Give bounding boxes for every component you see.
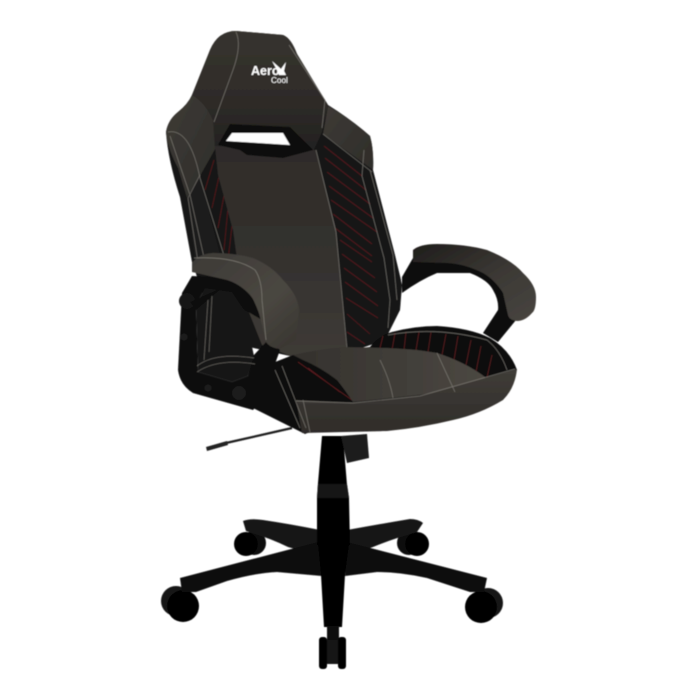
seat: [253, 326, 517, 434]
back right caster: [397, 531, 429, 556]
left armrest: [178, 253, 299, 410]
back left leg: [243, 519, 320, 556]
left wing: [166, 95, 218, 198]
arm adjuster: [179, 288, 246, 400]
left side panel with red stripes: [187, 148, 238, 262]
logo: Cool: [271, 76, 288, 85]
right wing: [323, 106, 373, 170]
left arm pad: [192, 253, 299, 349]
right side panel: [323, 135, 401, 347]
centre suede panel: [215, 146, 347, 358]
black side panels lower left: [187, 176, 222, 262]
front right leg: [345, 542, 487, 592]
base: star legs and casters: [161, 428, 503, 669]
seat suede cushion: [293, 347, 487, 402]
red stitching, left panel: [205, 160, 240, 345]
left frame inner back: [196, 288, 254, 382]
front caster: [319, 626, 346, 669]
seat black base: [253, 326, 517, 434]
backrest black shell: [166, 31, 402, 356]
seat front rim: [296, 369, 517, 433]
red stitching on seat band: [298, 332, 492, 400]
headrest: [192, 31, 328, 152]
right arm pad: [413, 244, 536, 321]
right arm support: [402, 258, 520, 342]
back right leg: [345, 519, 423, 556]
front right caster: [465, 588, 503, 623]
headrest handle slot: [218, 124, 313, 158]
seat stitching: [275, 331, 515, 432]
logo: [251, 61, 288, 85]
right armrest: [402, 244, 536, 342]
height lever: [206, 428, 292, 451]
arm stitching: [194, 258, 266, 340]
backrest: [166, 31, 402, 358]
stitching: [168, 32, 397, 348]
frame stitching: [197, 296, 255, 372]
left arm frame: [178, 276, 280, 410]
front leg: [318, 545, 349, 627]
tilt knob: [341, 434, 369, 463]
back left caster: [234, 531, 266, 556]
front left leg: [180, 542, 322, 592]
gas lift column: [317, 436, 350, 545]
red stitching, right panel: [324, 146, 378, 344]
chair: [161, 31, 536, 669]
front left caster: [161, 586, 199, 622]
logo: Aero: [251, 64, 280, 78]
